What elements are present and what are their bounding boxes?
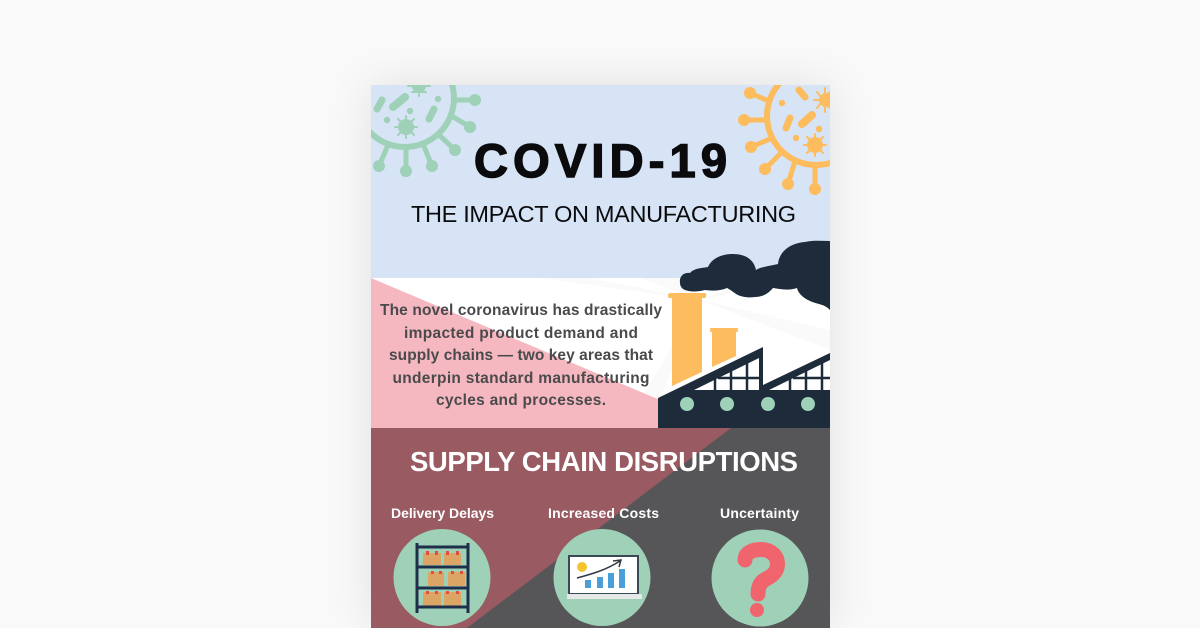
intro text: underpin standard manufacturing (392, 370, 650, 387)
icon: warehouse shelves (394, 529, 490, 626)
icon: question mark (712, 530, 808, 626)
illustration: factory building (658, 347, 830, 428)
panel: supply chain background (371, 428, 830, 628)
icon: orange virus (738, 85, 830, 195)
subtitle: THE IMPACT ON MANUFACTURING (411, 201, 796, 227)
panel: header background (371, 85, 830, 278)
intro text: cycles and processes. (436, 392, 606, 409)
icon: green virus (371, 85, 481, 177)
panel: intro background (371, 278, 658, 428)
intro text (380, 302, 662, 409)
label: delivery delays: Delivery Delays (391, 505, 494, 521)
illustration: short chimney (710, 328, 738, 367)
illustration: factory smoke (680, 241, 830, 310)
label: increased costs: Increased Costs (548, 505, 659, 521)
title: COVID-19 (474, 134, 727, 187)
intro text: impacted product demand and (404, 325, 638, 342)
label: uncertainty: Uncertainty (720, 505, 799, 521)
icon: laptop chart (554, 529, 650, 626)
illustration: tall chimney (668, 293, 706, 386)
intro text: The novel coronavirus has drastically (380, 302, 662, 319)
section heading: SUPPLY CHAIN DISRUPTIONS (410, 446, 798, 477)
intro text: supply chains — two key areas that (389, 347, 653, 364)
